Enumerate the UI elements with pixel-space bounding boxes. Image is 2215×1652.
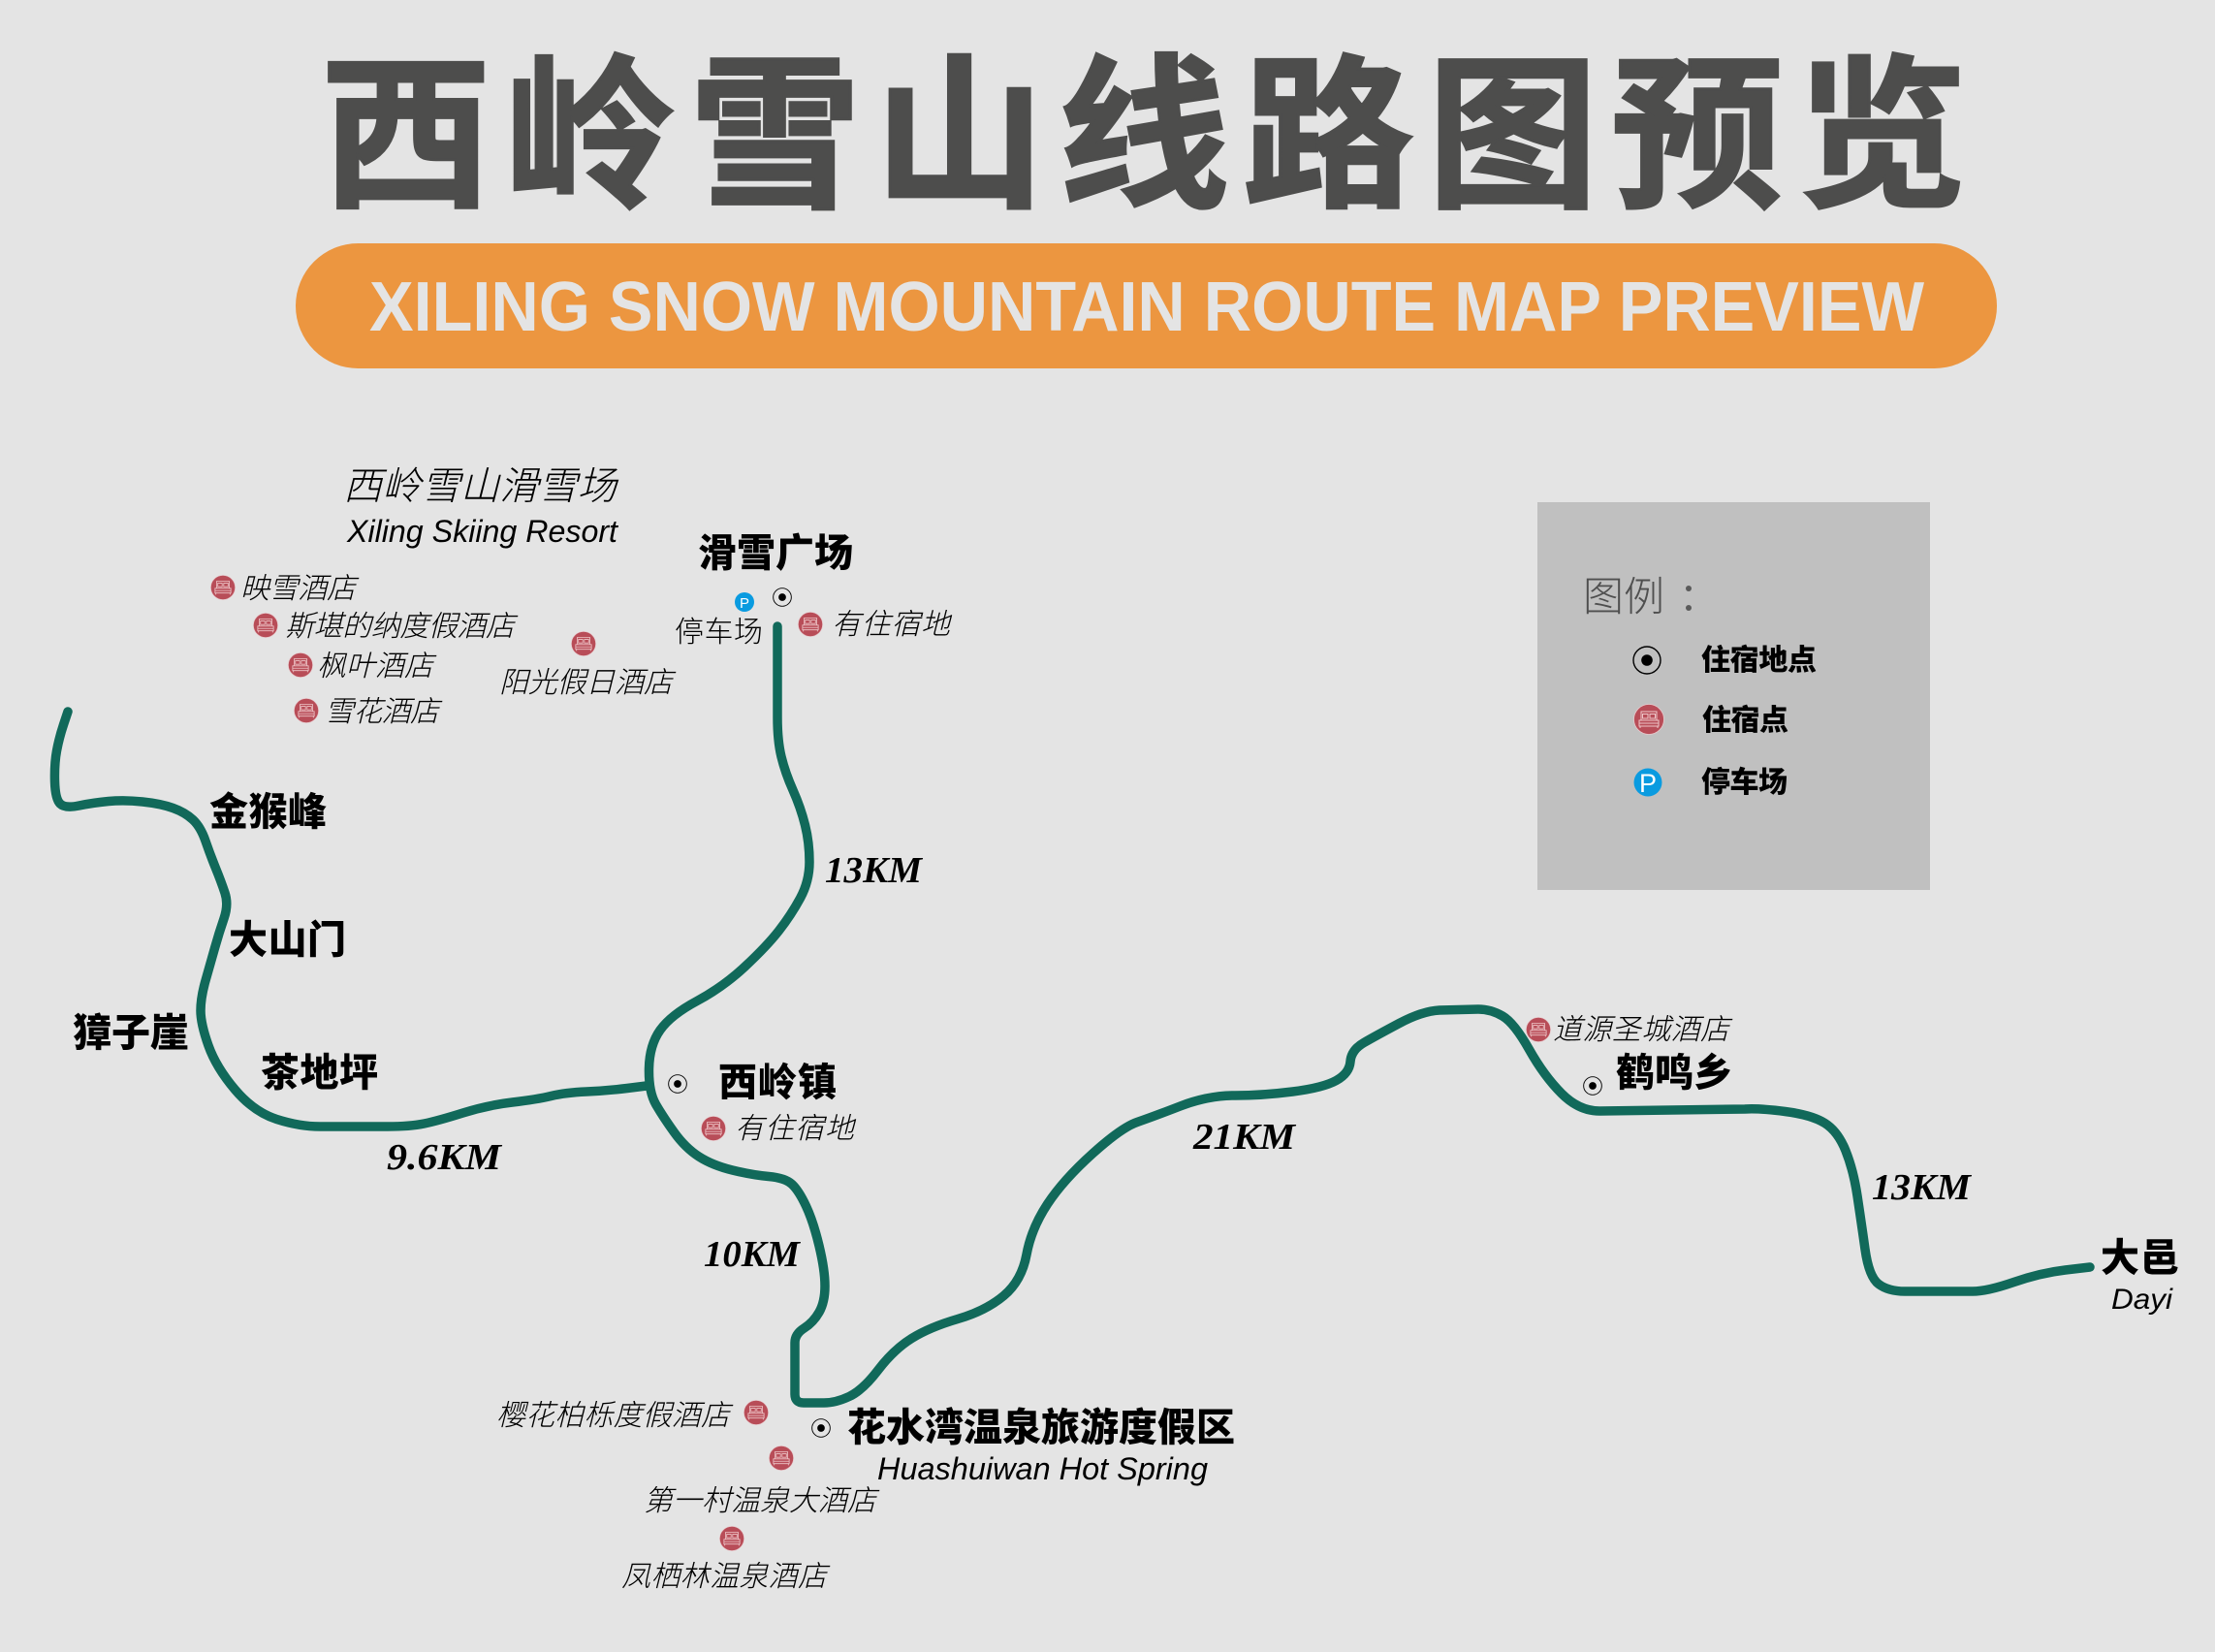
hotel: 凤栖林温泉酒店: 凤栖林温泉酒店 [621, 1561, 831, 1593]
icon: parking, ski plaza: P [740, 595, 749, 612]
hotel: 道源圣城酒店: 道源圣城酒店 [1553, 1014, 1733, 1046]
hotel: ski plaza lodging: 有住宿地 [832, 609, 953, 641]
hotel: 西岭镇 lodging: 有住宿地 [735, 1113, 857, 1145]
parking label: 停车场 [675, 617, 763, 649]
legend: hotel [1634, 704, 1788, 737]
place: 金猴峰: 金猴峰 [209, 791, 327, 834]
ski plaza label: 滑雪广场 [698, 532, 853, 575]
place: 茶地坪: 茶地坪 [261, 1052, 378, 1095]
place: 獐子崖: 獐子崖 [73, 1012, 189, 1055]
legend: hotel: 住宿点 [1702, 704, 1788, 737]
hotel: 第一村温泉大酒店 [644, 1446, 880, 1517]
legend panel [1537, 502, 1930, 890]
resort name: Xiling Skiing Resort [346, 514, 618, 549]
distance: 13KM east: 13KM [1872, 1167, 1972, 1208]
place: 大邑 [2101, 1237, 2179, 1316]
resort name [343, 465, 619, 549]
hotel: 阳光假日酒店: 阳光假日酒店 [499, 667, 677, 699]
icon: lodging place, ski plaza [774, 588, 791, 606]
hotel: 樱花柏栎度假酒店: 樱花柏栎度假酒店 [496, 1400, 734, 1432]
place: 大邑: 大邑 [2101, 1237, 2179, 1280]
hotel: 第一村温泉大酒店: 第一村温泉大酒店 [644, 1485, 880, 1517]
legend: lodging place [1633, 644, 1817, 677]
legend: parking: P [1639, 769, 1657, 798]
place: 花水湾温泉旅游度假区: 花水湾温泉旅游度假区 [847, 1406, 1235, 1449]
subtitle pill: XILING SNOW MOUNTAIN ROUTE MAP PREVIEW [369, 269, 1924, 346]
route: north and east branch [649, 626, 2090, 1403]
hotel: 凤栖林温泉酒店 [621, 1526, 831, 1593]
route: west branch [54, 712, 647, 1127]
hotel: 枫叶酒店: 枫叶酒店 [317, 651, 437, 683]
place: 西岭镇: 西岭镇 [718, 1062, 837, 1104]
legend: parking: 停车场 [1701, 766, 1788, 799]
legend: lodging place: 住宿地点 [1701, 644, 1817, 677]
distance: 10KM: 10KM [704, 1234, 801, 1275]
distance: 9.6KM: 9.6KM [387, 1137, 502, 1178]
title: 西岭雪山线路图预览 [321, 44, 1967, 229]
hotel: 映雪酒店: 映雪酒店 [240, 573, 360, 605]
subtitle pill [296, 243, 1997, 368]
hotel: 斯堪的纳度假酒店: 斯堪的纳度假酒店 [285, 611, 519, 643]
legend heading: 图例 [1583, 574, 1664, 620]
place: 鹤鸣乡: 鹤鸣乡 [1616, 1052, 1732, 1095]
icon: parking, ski plaza [735, 592, 754, 612]
distance: 21KM: 21KM [1192, 1117, 1296, 1158]
hotel: 阳光假日酒店 [499, 631, 677, 699]
resort name: 西岭雪山滑雪场 [343, 465, 619, 508]
route map lines [54, 626, 2090, 1403]
hotel: 雪花酒店: 雪花酒店 [325, 696, 443, 728]
place: 花水湾温泉旅游度假区 [812, 1406, 1235, 1486]
place: 大山门: 大山门 [229, 919, 346, 962]
place: 花水湾温泉旅游度假区: Huashuiwan Hot Spring [877, 1451, 1208, 1486]
place: 大邑: Dayi [2111, 1284, 2173, 1316]
distance: 13KM north: 13KM [825, 850, 923, 891]
legend: parking [1634, 766, 1788, 799]
